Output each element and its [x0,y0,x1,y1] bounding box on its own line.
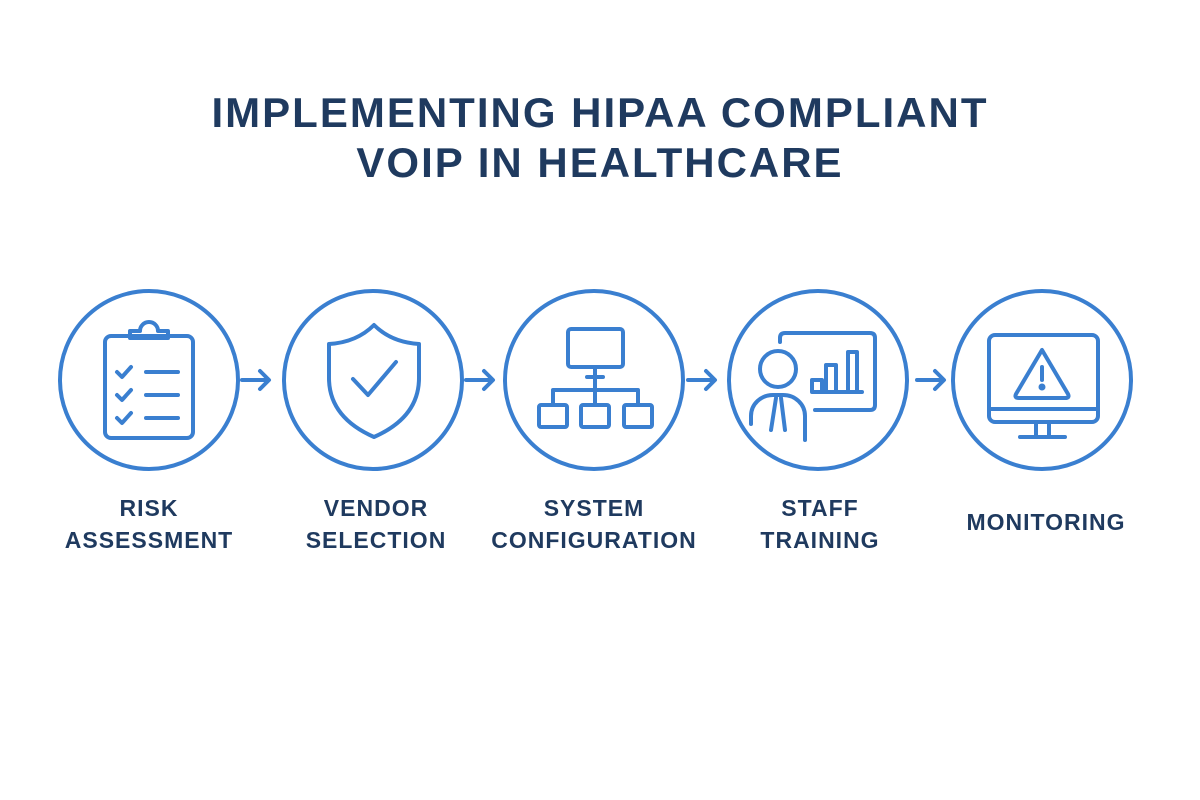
icon: shield with check [329,325,419,437]
step 1 circle: risk assessment [60,291,238,469]
step 5 circle: monitoring [953,291,1131,469]
label: risk assessment: ASSESSMENT [65,527,233,553]
label: staff training: STAFF [781,495,859,521]
icon: presenter with chart [751,333,875,440]
label: system configuration: SYSTEM [544,495,644,521]
label: system configuration: CONFIGURATION [491,527,697,553]
label: vendor selection [306,495,446,553]
label: risk assessment [65,495,233,553]
label: vendor selection: VENDOR [324,495,428,521]
step 3 circle: system configuration [505,291,683,469]
step 2 circle: vendor selection [284,291,462,469]
label: system configuration [491,495,697,553]
arrow 2 [466,371,493,389]
icon: network hierarchy [539,329,652,427]
arrow 4 [917,371,944,389]
icon: monitor with warning [989,335,1098,437]
label: staff training [760,495,880,553]
label: monitoring: MONITORING [966,509,1126,535]
label: staff training: TRAINING [760,527,880,553]
arrow 3 [688,371,715,389]
title: VOIP IN HEALTHCARE [356,139,844,186]
icon: clipboard [105,322,193,438]
title [212,89,988,186]
label: risk assessment: RISK [120,495,178,521]
label: vendor selection: SELECTION [306,527,446,553]
step 4 circle: staff training [729,291,907,469]
title: IMPLEMENTING HIPAA COMPLIANT [212,89,988,136]
arrow 1 [242,371,269,389]
